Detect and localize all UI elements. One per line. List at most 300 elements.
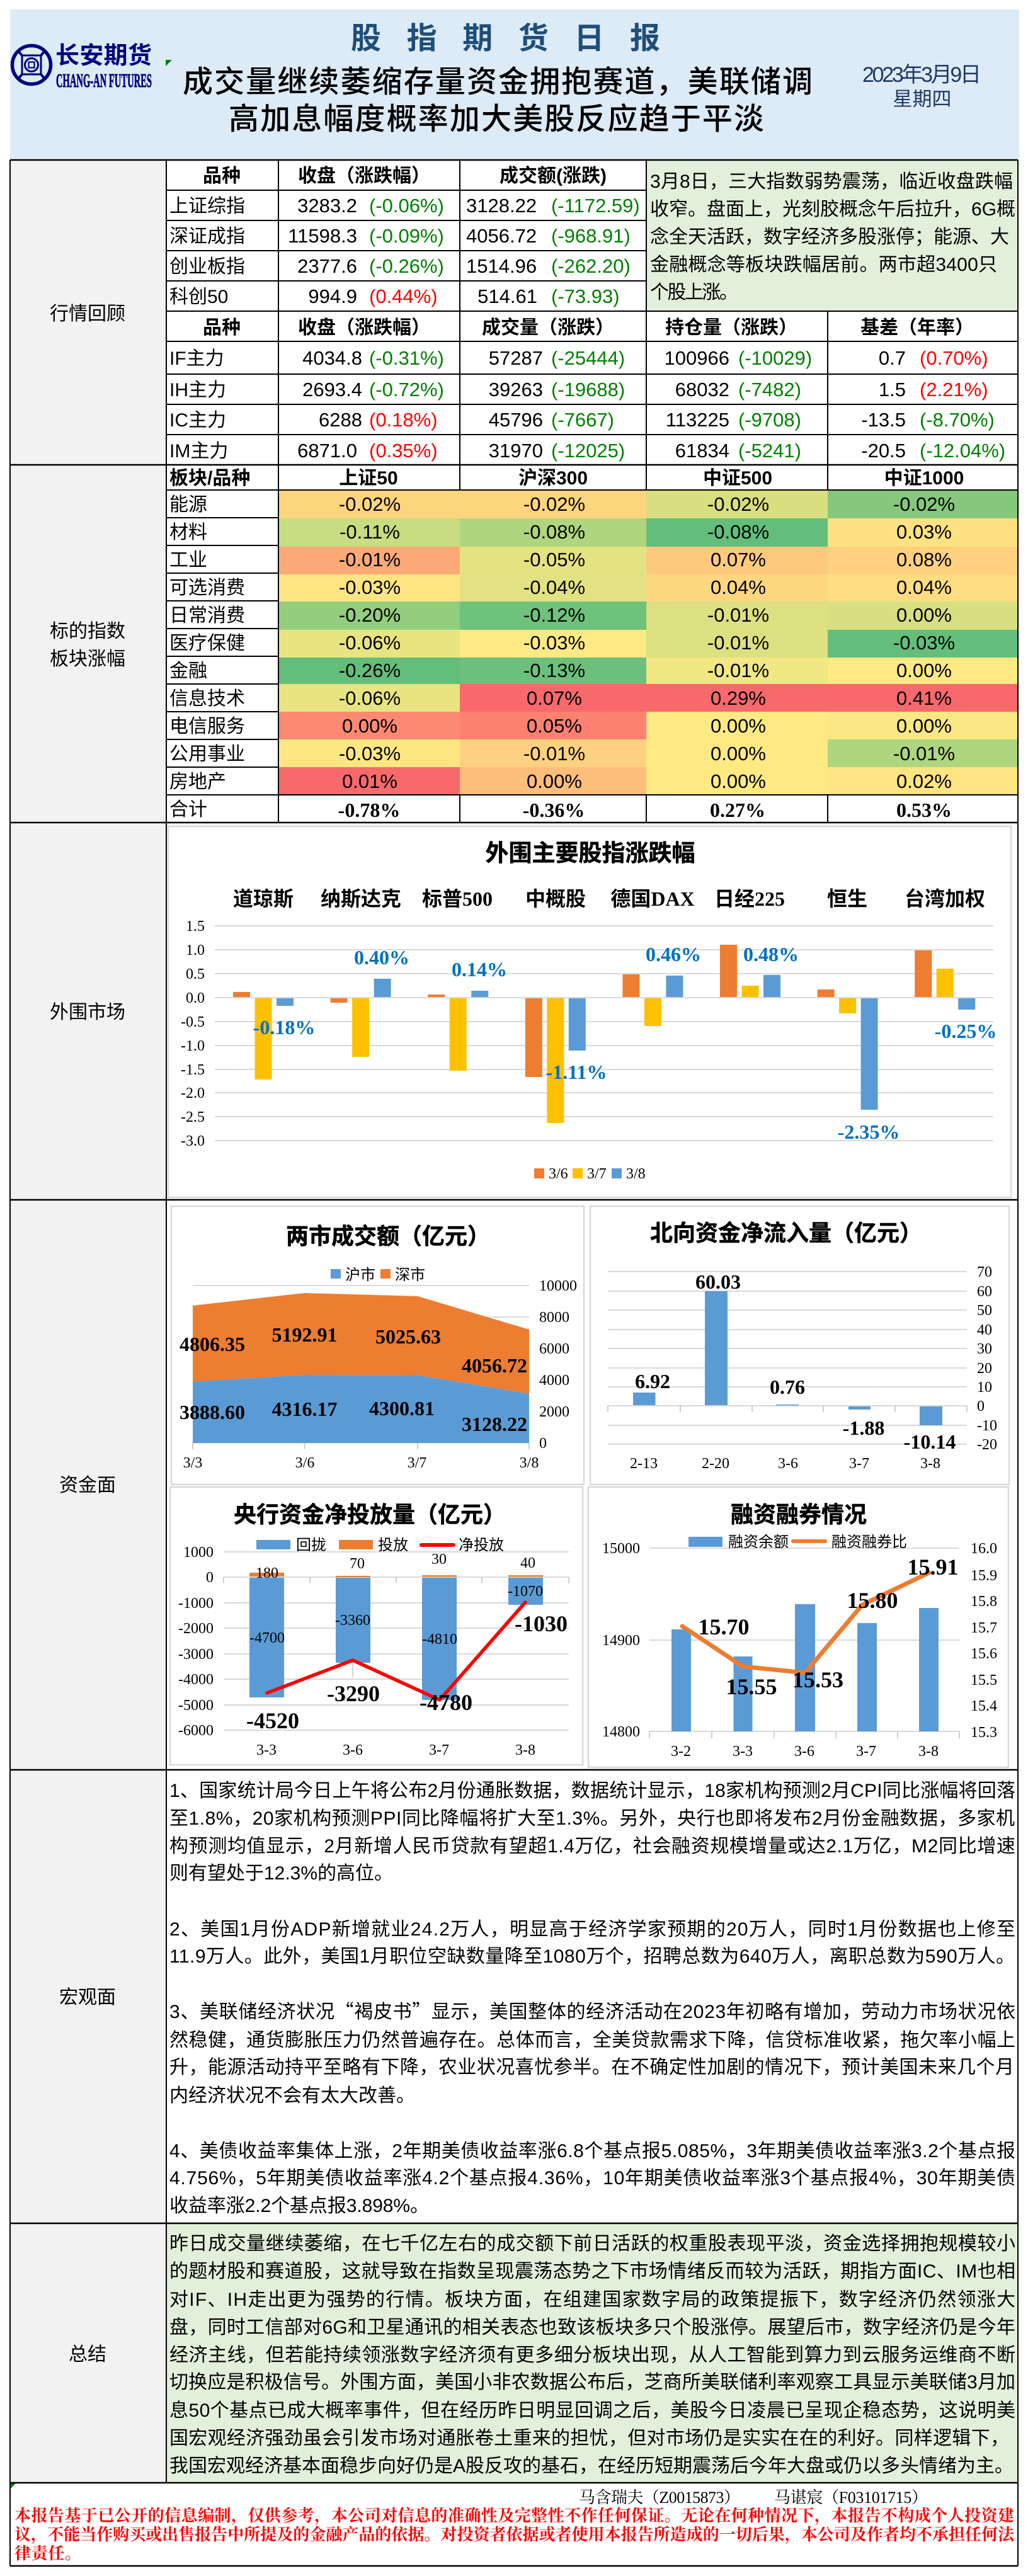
futures table: (-10029)	[738, 347, 812, 369]
overseas index chart	[168, 826, 1011, 1197]
axis labels: 3-2	[671, 1743, 691, 1760]
y axis labels: -1.5	[181, 1062, 205, 1078]
heat table rows: 0.03%	[896, 521, 952, 543]
futures table: IH主力	[169, 380, 226, 401]
net value labels: -1030	[515, 1611, 568, 1636]
axis labels: 20	[977, 1360, 992, 1377]
futures table: 100966	[665, 347, 729, 369]
axis labels: 10	[977, 1379, 992, 1396]
futures table: 持仓量（涨跌）	[665, 317, 797, 338]
legend: 3/7	[587, 1166, 607, 1182]
axis labels: 3/6	[295, 1455, 314, 1471]
heat table rows: 房地产	[169, 772, 226, 792]
withdraw bars	[249, 1578, 543, 1700]
y axis labels: 0.0	[186, 990, 205, 1006]
legend	[331, 1267, 425, 1284]
futures table: -13.5	[861, 409, 906, 431]
data labels: 4806.35	[180, 1333, 245, 1355]
y axis labels: -2.5	[181, 1109, 205, 1126]
ratio value labels: 15.53	[792, 1667, 843, 1692]
legend: 深市	[395, 1267, 425, 1284]
futures table: 61834	[675, 440, 729, 462]
heat table rows: 0.00%	[711, 770, 766, 792]
chart title: 融资融券情况	[731, 1502, 867, 1527]
market commentary note: 3月8日，三大指数弱势震荡，临近收盘跌幅	[650, 171, 1013, 192]
headline line two: 高加息幅度概率加大美股反应趋于平淡	[229, 103, 764, 136]
label: macro: 宏观面	[59, 1987, 116, 2008]
sector heat table	[166, 465, 1018, 823]
index names: 台湾加权	[905, 887, 985, 910]
heat table rows: -0.06%	[339, 632, 401, 654]
index names: 恒生	[827, 887, 867, 910]
spot index table: 3128.22	[466, 195, 537, 217]
axis labels: 70	[977, 1264, 992, 1280]
heat table rows: 可选消费	[169, 578, 245, 598]
margin financing chart	[588, 1487, 1008, 1767]
index names: 道琼斯	[233, 887, 294, 910]
axis labels: 8000	[539, 1309, 569, 1326]
chart title: 两市成交额（亿元）	[286, 1223, 490, 1249]
macro item two	[169, 1919, 1015, 1967]
axis labels	[178, 1544, 535, 1758]
axis labels: 3-6	[794, 1743, 814, 1760]
bars 3/7	[254, 969, 954, 1123]
axis labels: 0	[977, 1398, 985, 1415]
axis labels: 50	[977, 1302, 992, 1319]
heat table rows: -0.06%	[339, 687, 401, 709]
heat cells	[279, 491, 1018, 795]
heat table rows: 0.00%	[896, 715, 952, 737]
axis labels: -3000	[178, 1646, 214, 1663]
label: overseas market: 外围市场	[50, 1002, 125, 1023]
spot index table: (0.44%)	[369, 285, 438, 307]
summary panel: 昨日成交量继续萎缩，在七千亿左右的成交额下前日活跃的权重股表现平淡，资金选择拥抱规模较小	[169, 2233, 1015, 2254]
spot index table: 11598.3	[288, 225, 357, 247]
futures table: 品种	[203, 317, 241, 338]
macro item four: 收益率涨2.2个基点报3.898%。	[169, 2196, 429, 2216]
index names: 德国DAX	[610, 887, 695, 910]
macro item one: 则有望处于12.3%的高位。	[169, 1863, 393, 1884]
axis labels: 3/7	[408, 1455, 426, 1471]
bar value labels: -1070	[508, 1583, 543, 1600]
heat table header: 沪深300	[518, 468, 588, 489]
weekday: 星期四	[893, 88, 951, 110]
market commentary note: 个股上涨。	[650, 282, 738, 303]
axis labels: -4000	[178, 1672, 214, 1688]
axis labels: 15000	[602, 1541, 640, 1557]
market commentary note: 收窄。盘面上，光刻胶概念午后拉升，6G概	[650, 199, 1015, 220]
spot index table: (-1172.59)	[551, 195, 640, 217]
macro item four: 4.756%，5年期美债收益率涨4.2个基点报4.36%，10年期美债收益率涨3个基点报4%，30年期美债	[169, 2168, 1015, 2189]
heat table rows: 信息技术	[169, 688, 245, 709]
y axis labels: -3.0	[181, 1133, 205, 1149]
futures table: IC主力	[169, 410, 226, 431]
macro item one: 至1.8%，20家机构预测PPI同比降幅将扩大至1.3%。另外，央行也即将发布2月份金融数据，多家机	[169, 1808, 1015, 1829]
report date: 2023年3月9日	[862, 63, 981, 87]
bar value labels: -4700	[249, 1630, 285, 1646]
futures table: (-7667)	[551, 409, 614, 431]
futures table: 成交量（涨跌）	[482, 317, 614, 338]
legend: 融资融券比	[831, 1534, 907, 1551]
axis labels: 3-7	[429, 1742, 449, 1758]
axis labels: -10	[977, 1418, 997, 1434]
axis labels: 6000	[539, 1341, 569, 1357]
label: sector heat: 标的指数	[50, 621, 125, 642]
futures table: 收盘（涨跌幅）	[298, 317, 430, 338]
summary panel: 息50个基点已成大概率事件，但在经历昨日明显回调之后，美股今日凌晨已呈现企稳态势，这说明美	[169, 2400, 1015, 2421]
blue data labels	[253, 943, 997, 1143]
futures table: (-25444)	[551, 347, 625, 369]
heat table rows: -0.01%	[339, 549, 401, 571]
heat table rows: 日常消费	[169, 605, 245, 626]
net value labels: -4520	[246, 1708, 299, 1733]
axis labels: 60	[977, 1284, 992, 1300]
futures table: (-12.04%)	[920, 440, 1005, 462]
heat table rows: 0.00%	[896, 659, 952, 681]
data labels: 5025.63	[375, 1325, 441, 1348]
heat table rows: -0.01%	[707, 659, 769, 681]
label: market review: 行情回顾	[50, 304, 125, 324]
heat table rows: 0.04%	[711, 576, 766, 598]
heat table rows: -0.26%	[339, 659, 401, 681]
areas	[193, 1293, 529, 1443]
company logo	[13, 43, 152, 91]
risk statement	[14, 2506, 1015, 2563]
spot index table: 4056.72	[466, 225, 537, 247]
heat table rows: 0.01%	[342, 770, 397, 792]
bar value labels: -4810	[422, 1631, 457, 1648]
macro item one: 1、国家统计局今日上午将公布2月份通胀数据，数据统计显示，18家机构预测2月CPI同比涨幅将回落	[169, 1781, 1015, 1801]
axis labels: 3-3	[733, 1743, 753, 1760]
macro item two: 2、美国1月份ADP新增就业24.2万人，明显高于经济学家预期的20万人，同时1月份数据也上修至	[169, 1919, 1015, 1940]
turnover area chart	[171, 1206, 584, 1485]
macro item one: 构预测均值显示，2月新增人民币贷款有望超1.4万亿，社会融资规模增量或达2.1万亿，M2同比增速	[169, 1836, 1015, 1857]
data labels	[180, 1323, 527, 1435]
futures table: (-12025)	[551, 440, 625, 462]
spot index table	[169, 166, 640, 307]
heat table total row	[169, 799, 952, 821]
heat table rows: -0.01%	[523, 743, 585, 765]
summary panel: 经济主线，但若能持续领涨数字经济须有更多细分板块出现，从人工智能到算力到云服务运维商不断	[169, 2345, 1015, 2366]
table rules	[166, 160, 1018, 465]
macro item four: 4、美债收益率集体上涨，2年期美债收益率涨6.8个基点报5.085%，3年期美债收益率涨3.2个基点报	[169, 2141, 1015, 2162]
axis labels: 16.0	[971, 1541, 997, 1557]
margin balance bars	[671, 1604, 939, 1731]
axis labels: -1000	[178, 1595, 214, 1612]
axis labels: 2000	[539, 1404, 569, 1420]
data labels	[635, 1270, 956, 1453]
injection bars	[249, 1573, 543, 1577]
summary panel: 国宏观经济强劲虽会引发市场对通胀卷土重来的担忧，但对市场仍是实实在在的利好。同样逻辑下，	[169, 2428, 1009, 2449]
bar value labels: 180	[256, 1565, 278, 1582]
axis labels: -5000	[178, 1697, 214, 1714]
axis labels: -2000	[178, 1621, 214, 1637]
futures table: 45796	[489, 409, 543, 431]
axis labels: -20	[977, 1437, 997, 1453]
axis labels: 0	[206, 1570, 214, 1586]
data labels: 4056.72	[462, 1354, 527, 1377]
legend: 3/6	[549, 1166, 568, 1182]
market review table	[166, 160, 1018, 465]
data labels: 4316.17	[272, 1398, 338, 1420]
summary panel: 切换应是积极信号。外围方面，美国小非农数据公布后，芝商所美联储利率观察工具显示美联储3月加	[169, 2372, 1015, 2393]
futures table: 39263	[489, 379, 543, 401]
chart title: 外围主要股指涨跌幅	[485, 840, 695, 866]
macro item two: 11.9万人。此外，美国1月职位空缺数量降至1080万个，招聘总数为640万人，离职总数为590万人。	[169, 1946, 1015, 1967]
axis labels: 3-6	[343, 1742, 363, 1758]
heat table rows: -0.04%	[523, 576, 585, 598]
index names: 中概股	[525, 887, 586, 910]
futures table: 2693.4	[302, 379, 362, 401]
futures table: 6871.0	[297, 440, 357, 462]
futures table: -20.5	[861, 440, 906, 462]
headline line one: 成交量继续萎缩存量资金拥抱赛道，美联储调	[183, 66, 813, 99]
heat table rows: 0.07%	[711, 549, 766, 571]
axis labels: 3-7	[849, 1456, 869, 1472]
axis labels: 15.8	[971, 1593, 997, 1610]
heat table rows: 0.00%	[527, 770, 582, 792]
report title: 股 指 期 货 日 报	[351, 22, 660, 55]
axis labels: 15.4	[971, 1698, 997, 1714]
heat table rows: -0.03%	[339, 743, 401, 765]
heat table header: 中证500	[703, 468, 772, 489]
heat table rows: 电信服务	[169, 716, 245, 737]
futures table: (-19688)	[551, 379, 625, 401]
legend: 回拢	[296, 1537, 326, 1554]
futures table: (-5241)	[738, 440, 801, 462]
futures table: (0.70%)	[920, 347, 988, 369]
ratio value labels: 15.91	[907, 1554, 959, 1580]
axis labels: 15.6	[971, 1646, 997, 1662]
heat table rows: 材料	[169, 522, 207, 543]
futures table: (-7482)	[738, 379, 801, 401]
futures table: 31970	[489, 440, 543, 462]
axis labels: 1000	[183, 1544, 214, 1561]
risk statement: 律责任。	[14, 2545, 81, 2563]
heat table rows: 0.29%	[711, 687, 766, 709]
axis labels: 30	[977, 1341, 992, 1357]
heat table rows: -0.02%	[707, 493, 769, 515]
legend: 融资余额	[728, 1534, 789, 1551]
heat table total row: -0.78%	[338, 799, 400, 821]
heat table rows: -0.02%	[339, 493, 401, 515]
market commentary note: 念全天活跃，数字经济多股涨停；能源、大	[650, 227, 1009, 248]
bars	[633, 1291, 942, 1425]
futures table: 68032	[675, 379, 729, 401]
futures table: 6288	[319, 409, 362, 431]
spot index table: 收盘（涨跌幅）	[298, 166, 430, 186]
net injection line	[267, 1602, 525, 1700]
blue data labels: -1.11%	[546, 1061, 607, 1083]
blue data labels: 0.48%	[743, 943, 799, 966]
heat table rows: 0.00%	[896, 604, 952, 626]
heat table rows: -0.08%	[707, 521, 769, 543]
spot index table: (-262.20)	[551, 255, 631, 277]
index names	[233, 887, 985, 910]
axis labels: -6000	[178, 1723, 214, 1739]
axis labels: 3-3	[256, 1742, 277, 1758]
heat table rows: 0.00%	[342, 715, 397, 737]
blue data labels: 0.14%	[452, 958, 507, 981]
heat table rows: 0.08%	[896, 549, 952, 571]
heat table rows: -0.01%	[707, 604, 769, 626]
futures table: (-8.70%)	[920, 409, 995, 431]
heat table rows: 0.00%	[711, 715, 766, 737]
header banner: CHANG-AN FUTURES	[56, 69, 152, 91]
axis labels: 4000	[539, 1372, 569, 1389]
northbound flow chart	[590, 1206, 1009, 1485]
axis labels: 10000	[539, 1278, 577, 1294]
bar value labels: 70	[350, 1556, 365, 1572]
analyst names	[579, 2488, 928, 2507]
heat table rows: 0.05%	[527, 715, 582, 737]
futures table: (0.35%)	[369, 440, 438, 462]
blue data labels: -0.18%	[253, 1016, 315, 1039]
risk statement: 本报告基于已公开的信息编制，仅供参考，本公司对信息的准确性及完整性不作任何保证。无论在何种情况下，本报告不构成个人投资建	[14, 2506, 1014, 2526]
axis labels: 15.3	[971, 1724, 997, 1741]
axis labels	[602, 1541, 997, 1760]
blue data labels: -0.25%	[935, 1020, 997, 1042]
data labels: 60.03	[695, 1270, 741, 1293]
analyst names: 马谌宸（F03101715）	[774, 2488, 928, 2507]
heat table header: 板块/品种	[169, 468, 250, 489]
futures table: (-0.31%)	[369, 347, 444, 369]
heat table header: 上证50	[339, 468, 398, 489]
spot index table: 深证成指	[169, 226, 245, 247]
y axis labels: -2.0	[181, 1085, 205, 1102]
market commentary note	[647, 161, 1018, 311]
spot index table: 1514.96	[466, 255, 537, 277]
futures table: (0.18%)	[369, 409, 438, 431]
blue data labels: 0.46%	[646, 943, 701, 966]
spot index table: 2377.6	[297, 255, 357, 277]
index names: 纳斯达克	[321, 887, 401, 910]
axis labels: 0	[539, 1435, 547, 1452]
heat table rows	[169, 493, 955, 792]
heat table total row: 0.53%	[896, 799, 952, 821]
heat table rows: 公用事业	[169, 744, 245, 765]
macro item four	[169, 2141, 1015, 2216]
heat table rows: -0.03%	[339, 576, 401, 598]
axis labels: 40	[977, 1322, 992, 1338]
ratio value labels: 15.55	[726, 1674, 777, 1699]
chart title: 央行资金净投放量（亿元）	[234, 1502, 506, 1527]
data labels: -10.14	[904, 1430, 956, 1453]
y axis labels	[181, 918, 205, 1149]
legend	[534, 1166, 646, 1182]
axis labels: 14800	[602, 1724, 640, 1740]
futures table: 0.7	[879, 347, 906, 369]
bar value labels: 30	[431, 1551, 447, 1568]
heat table rows: -0.01%	[893, 743, 955, 765]
macro item three: 升，能源活动持平至略有下降，农业状况喜忧参半。在不确定性加剧的情况下，预计美国未来几个月	[169, 2057, 1014, 2078]
heat table rows: -0.05%	[523, 549, 585, 571]
heat table rows: -0.03%	[523, 632, 585, 654]
header banner	[10, 9, 1019, 159]
y axis labels: 1.5	[186, 918, 205, 935]
spot index table: (-968.91)	[551, 225, 631, 247]
heat table rows: -0.20%	[339, 604, 401, 626]
legend: 沪市	[345, 1267, 375, 1284]
bars 3/8	[277, 975, 975, 1110]
axis labels: 3-8	[515, 1742, 535, 1758]
bars 3/6	[233, 945, 932, 1077]
futures table: (2.21%)	[920, 379, 988, 401]
macro item three	[169, 1996, 1015, 2106]
heat table rows: 金融	[169, 661, 207, 681]
futures table: 57287	[489, 347, 543, 369]
data labels: -1.88	[843, 1416, 884, 1439]
heat table total row: -0.36%	[523, 799, 585, 821]
heat table rows: 0.02%	[896, 770, 952, 792]
data labels: 4300.81	[369, 1397, 435, 1420]
futures table: 113225	[666, 409, 729, 431]
spot index table: 上证综指	[169, 196, 245, 217]
blue data labels: -2.35%	[838, 1120, 900, 1143]
macro commentary	[169, 1781, 1015, 2216]
legend: 3/8	[626, 1166, 646, 1182]
chart title: 北向资金净流入量（亿元）	[650, 1220, 922, 1246]
section labels column	[10, 160, 166, 2483]
central bank liquidity chart	[170, 1487, 583, 1765]
heat table rows: -0.12%	[523, 604, 585, 626]
spot index table: 品种	[203, 166, 241, 186]
spot index table: 3283.2	[297, 195, 357, 217]
axis labels: 3/8	[520, 1455, 539, 1471]
spot index table: (-0.06%)	[369, 195, 444, 217]
spot index table: (-0.09%)	[369, 225, 444, 247]
net value labels	[246, 1611, 568, 1733]
bar value labels: 40	[520, 1555, 535, 1571]
label: summary: 总结	[69, 2344, 106, 2365]
heat table rows: 工业	[169, 550, 207, 571]
company logo: 长安期货	[55, 43, 152, 69]
market commentary note: 金融概念等板块跌幅居前。两市超3400只	[650, 254, 997, 275]
y axis labels: 1.0	[186, 942, 205, 959]
cell marker	[166, 60, 172, 66]
macro item three: 内经济状况不会有太大改善。	[169, 2085, 415, 2106]
summary panel: 的题材股和赛道股，这就导致在指数呈现震荡态势之下市场情绪反而较为活跃，期指方面IC、IM也相	[169, 2261, 1015, 2282]
macro item three: 3、美联储经济状况“褐皮书”显示，美国整体的经济活动在2023年初略有增加，劳动力市场状况依	[169, 1996, 1015, 2024]
risk statement: 议，不能当作购买或出售报告中所提及的金融产品的依据。对投资者依据或者使用本报告所造成的一切后果，本公司及作者均不承担任何法	[14, 2525, 1015, 2545]
legend: 净投放	[459, 1537, 504, 1554]
axis labels: 2-13	[630, 1456, 658, 1472]
heat table rows: -0.01%	[707, 632, 769, 654]
axis labels: 2-20	[702, 1456, 729, 1472]
futures table: 基差（年率）	[860, 317, 974, 338]
summary panel: 对IF、IH走出更为强势的行情。板块方面，在组建国家数字局的政策提振下，数字经济仍然领涨大	[169, 2289, 1015, 2310]
axis labels: 3-6	[778, 1456, 798, 1472]
axis labels: 3-8	[920, 1456, 940, 1472]
heat table rows: -0.02%	[893, 493, 955, 515]
macro item one	[169, 1781, 1015, 1884]
axis labels: 14900	[602, 1633, 640, 1649]
data labels: 5192.91	[272, 1323, 338, 1346]
heat table header	[169, 468, 964, 489]
axis labels: 15.9	[971, 1568, 997, 1584]
summary panel: 我国宏观经济基本面稳步向好仍是A股反攻的基石，在经历短期震荡后今年大盘或仍以多头情绪为主。	[169, 2456, 1014, 2476]
heat table rows: 0.04%	[896, 576, 952, 598]
futures table	[169, 317, 1005, 462]
label: sector heat: 板块涨幅	[50, 649, 125, 670]
label: funds: 资金面	[59, 1475, 116, 1496]
legend	[256, 1537, 504, 1554]
y axis labels: 0.5	[186, 966, 205, 983]
heat table rows: 医疗保健	[169, 633, 245, 654]
data labels: 3128.22	[462, 1413, 527, 1435]
spot index table: 成交额(涨跌)	[500, 166, 607, 186]
spot index table: 514.61	[477, 285, 537, 307]
